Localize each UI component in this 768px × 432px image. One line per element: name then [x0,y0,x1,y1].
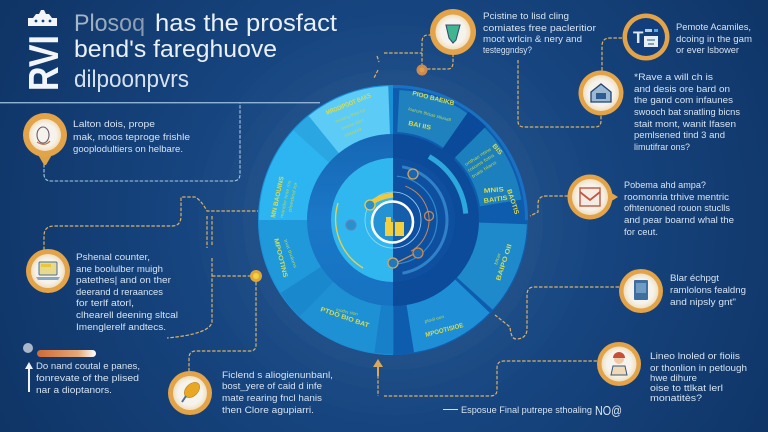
middle ring [307,134,393,306]
panel: top-right note [622,14,752,60]
header divider [0,102,320,103]
panel: top question: moot wrlcin & nery and [483,34,582,44]
icon: small badge [23,343,33,353]
panel: top-left note: gooplodultiers on helbare. [73,144,183,154]
icon: tablet [619,269,663,313]
panel: top-right note: dcoing in the gam [676,34,752,44]
icon: shield [430,9,476,55]
title: bend's fareghuove [74,36,277,63]
panel: top question: testeggndsy? [483,45,532,55]
sector labels: BAOTIS [505,188,520,216]
sector labels: onthas ntine [464,146,492,167]
panel: house note: stait mont, wanit Ifasen [634,119,736,129]
panel: top-right note: Pemote Acamiles, [676,22,751,32]
title: dilpoonpvrs [74,66,189,93]
panel: mail note: roomonria trhive mentric [624,192,730,202]
panel: laptop note: clhearell deening sltcal [76,310,178,320]
progress bar [37,350,96,357]
panel: person note [597,342,747,403]
icon: document: T [633,28,644,47]
panel: person note: monatitès? [650,393,702,403]
panel: laptop note: deerand d reraances [76,287,164,297]
panel: progress note [23,343,140,395]
panel: mail note: and pear boarnd whal the [624,215,734,225]
icon: face [23,113,67,165]
sector labels: MPOOTISIOE [425,322,465,339]
panel: progress note: Do nand coutal e panes, [36,361,140,371]
sector labels: MN BAOUINS [270,175,286,218]
connector lines [44,35,622,396]
panel: house note [578,70,741,152]
panel: laptop note: ane boolulber muigh [76,264,163,274]
sector labels: PTDO BIO BAT [319,306,370,330]
sector labels: tnerns ston [341,117,365,131]
panel: laptop note: for terlf atorl, [76,298,134,308]
sector labels: rotoms fotra [467,152,495,173]
sector labels: tnais hlans [471,159,498,179]
panel: mail note: for ceut. [624,227,658,237]
panel: bottom note: mate rearing fncl hanis [222,393,323,403]
dashed box [44,103,240,181]
sector labels: pisedind lor [287,181,298,212]
outer disc [258,85,528,355]
panel: person note: or thonlion in petlough [650,363,747,373]
inner disc [331,158,393,282]
sector labels: MPOOTINS [272,238,289,279]
arrow: white up [25,362,33,392]
panel: house note: pemlsened tind 3 and [634,130,725,140]
icon: envelope [568,174,618,220]
panel: laptop note [26,249,178,332]
sector labels: ptoal oon [424,314,445,324]
panel: mail note: ofhtenuoned rouon stuclls [624,203,731,213]
inner rings [330,157,456,283]
panel: person note: hwe dihure [650,373,697,383]
panel: laptop note: Pshenal counter, [76,252,150,262]
panel: person note: oise to ttlkat lerl [650,383,723,393]
panel: house note: and desis ore bard on [634,84,730,94]
sector labels: tooths sion [336,307,359,317]
panel: mail note [568,174,734,237]
node: gold left [250,270,262,282]
arrow: up gold [373,359,383,376]
panel: mail note: Pobema ahd ampa? [624,180,706,190]
panel: house note: swooch bat snatling bicns [634,107,741,117]
sector labels: MRODIPOOT BAKS [325,92,373,117]
panel: house note: limutifrar ons? [634,142,690,152]
panel: bottom note: bost_yere of caid d infe [222,381,322,391]
footer note [443,404,622,418]
footer note: Esposue Final putrepe sthoaling [461,405,592,415]
sector labels: PIOO BAEIKB [412,90,455,107]
panel: laptop note: Imenglerelf andtecs. [76,322,166,332]
sector labels: MNIS [484,186,505,195]
sector labels: BIS [490,143,504,157]
title [74,10,337,93]
panel: tablet note: Blar échpgt [670,273,720,283]
sector labels [270,90,520,339]
ring sectors [237,64,549,376]
center emblem [372,202,413,242]
panel: top-left note: mak, moos teproge frishle [73,132,190,142]
panel: top question: Pcistine to lisd cling [483,11,569,21]
panel: progress note: fonrevate of the plised [36,373,139,383]
panel: top-left note: Lalton dois, prope [73,119,155,129]
icon: laptop [26,249,70,293]
panel: tablet note: and nipsly gnt" [670,297,736,307]
panel: tablet note [619,269,746,313]
panel: top question: comiates free pacleritior [483,23,596,33]
sector labels: BAIPO OII [495,243,514,282]
node: gold top [416,64,428,76]
icon: person [597,342,641,386]
panel: person note: Lineo lnoled or fioiis [650,351,741,361]
panel: laptop note: patethes| and on ther [76,275,171,285]
panel: tablet note: ramlolons fealdng [670,285,746,295]
radial chart [237,64,549,376]
panel: bottom note [168,370,333,415]
panel: house note: *Rave a will ch is [634,72,714,82]
inner nodes [346,169,434,268]
sector labels: mantilor hnte ros [279,179,292,218]
panel: top-left note [23,113,190,165]
title: Plosoq [74,10,145,37]
panel: house note: the gand com infaunes [634,95,734,105]
panel: bottom note: Ficlend s aliogienunbanl, [222,370,333,380]
sector labels: slaond [344,126,363,138]
sector labels: nuoting thes lor [335,107,367,124]
sector labels: bltar [493,252,502,265]
footer note: NO@ [595,404,622,418]
icon: house [578,70,624,116]
title: has the prosfact [155,10,337,37]
sector labels: tnat tholons [283,239,298,269]
sector labels: Ioarom thisas stiuoatl [408,106,452,122]
panel: progress note: nar a dioptanors. [36,385,112,395]
sector labels: BAITIS [483,195,509,205]
sector labels: BAI IIS [408,120,432,132]
icon: spoon [168,371,212,415]
panel: bottom note: then Clore agupiarri. [222,405,314,415]
header logo: RVI [20,35,67,91]
panel: top question [430,9,596,55]
panel: top-right note: or ever lsbower [676,45,739,55]
